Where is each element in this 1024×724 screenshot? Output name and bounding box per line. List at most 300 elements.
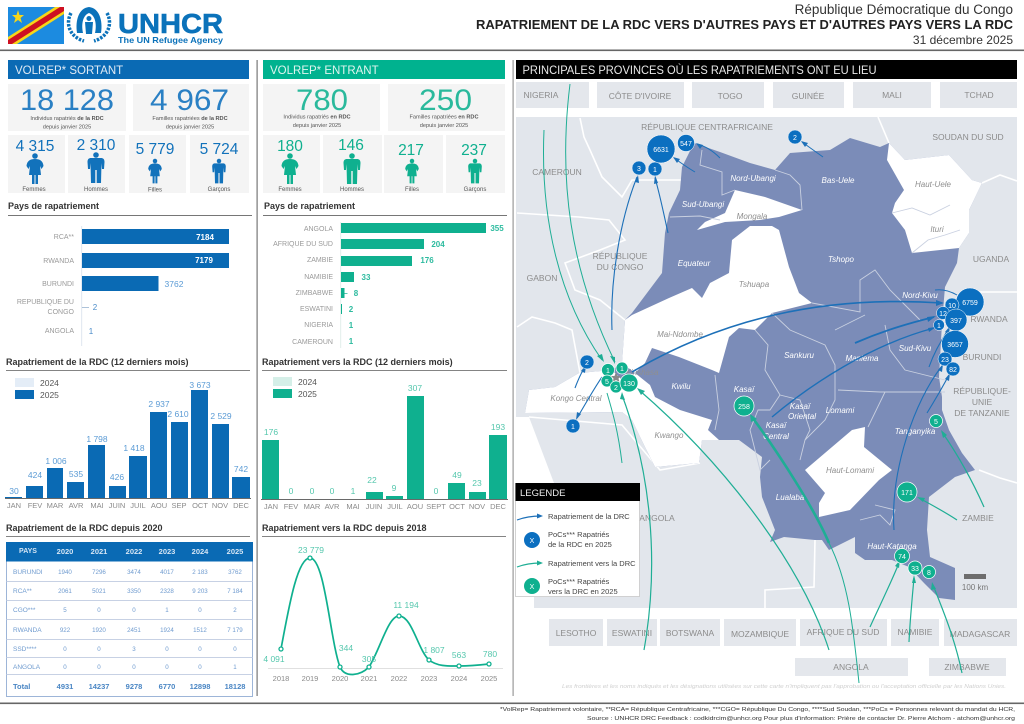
bar chart: 12 derniers mois sortant: NOV [212, 501, 228, 510]
stat: familles entrantes: Familles rapatriées en RDC [409, 114, 479, 120]
table: rapatriement depuis 2020: 1940 [58, 569, 72, 576]
bar chart: pays de rapatriement entrant: ZAMBIE [307, 257, 333, 264]
map markers: blue circles: 1 [937, 323, 941, 330]
table: rapatriement depuis 2020: 1 [165, 607, 169, 614]
title block: République Démocratique du Congo [795, 2, 1013, 17]
table: rapatriement depuis 2020: RCA** [13, 588, 32, 595]
bar chart: pays de rapatriement entrant: 33 [362, 273, 371, 282]
map markers: green circles: 5 [605, 379, 609, 386]
bar chart: 12 derniers mois entrant: 49 [452, 470, 462, 480]
bar chart: pays de rapatriement entrant: ESWATINI [300, 306, 333, 313]
map markers: blue circles: 82 [949, 367, 957, 374]
stat: garçons entrant [446, 135, 505, 193]
map markers: green circles: 258 [738, 404, 750, 411]
logo text: UNHCR: UNHCR [118, 8, 223, 39]
map labels: provinces: Central [763, 432, 789, 441]
bar chart: 12 derniers mois entrant: NOV [469, 502, 485, 511]
bar chart: 12 derniers mois entrant: OCT [449, 502, 465, 511]
bar chart: pays de rapatriement entrant: 176 [420, 256, 434, 265]
bar chart: pays de rapatriement sortant: ANGOLA [45, 328, 74, 335]
map labels: provinces [550, 174, 952, 551]
map labels: provinces: Maniema [846, 354, 879, 363]
bar chart: 12 derniers mois sortant [5, 378, 251, 510]
title block [476, 2, 1014, 47]
bar chart: 12 derniers mois entrant: 193 [491, 422, 505, 432]
bar chart: 12 derniers mois entrant: 307 [408, 383, 422, 393]
country boxes: bottom rows: BOTSWANA [666, 628, 714, 638]
stat: filles entrant: Filles [405, 187, 419, 193]
arrows: repatriation to DRC (green) [543, 84, 984, 683]
stat: familles entrantes [388, 84, 505, 131]
map labels: provinces: Lomami [826, 406, 854, 415]
bar chart: 12 derniers mois sortant: 2 610 [167, 409, 189, 419]
bar chart: pays de rapatriement entrant: ANGOLA [304, 226, 333, 233]
map labels: provinces: Haut-Katanga [867, 542, 917, 551]
stat: familles entrantes: 250 [419, 84, 472, 117]
table: rapatriement depuis 2020: 922 [60, 627, 71, 634]
bar chart: pays de rapatriement sortant: RWANDA [43, 258, 74, 265]
heading: depuis 2018: Rapatriement vers la RDC depuis 2018 [262, 523, 427, 533]
map labels: countries: SOUDAN DU SUD [932, 132, 1004, 142]
country boxes: top row: CÔTE D'IVOIRE [609, 91, 672, 101]
table: rapatriement depuis 2020: 5021 [92, 588, 106, 595]
stat: hommes entrant [323, 135, 382, 193]
legend: sortant: 2024 [40, 378, 59, 388]
table: rapatriement depuis 2020: 14237 [89, 682, 109, 691]
country boxes: bottom rows [549, 619, 1017, 676]
stat: garçons: 5 724 [200, 141, 239, 158]
map labels: countries: RÉPUBLIQUE CENTRAFRICAINE [641, 122, 773, 132]
map markers: blue circles: 397 [950, 318, 962, 325]
table: rapatriement depuis 2020: 4017 [160, 569, 174, 576]
disclaimer: Les frontières et les noms indiqués et les désignations utilisées sur cette carte n'impliquent pas l'approbation ou l'acceptation officielle par les Nations Unies. [562, 684, 1006, 690]
map markers: blue circles: 23 [941, 357, 949, 364]
heading: 12 derniers mois entrant: Rapatriement vers la RDC (12 derniers mois) [262, 357, 453, 367]
bar chart: 12 derniers mois entrant: 176 [264, 427, 278, 437]
map labels: countries: BURUNDI [963, 352, 1001, 362]
legend: de la RDC en 2025 [548, 540, 612, 549]
legend [516, 483, 640, 596]
bar chart: 12 derniers mois sortant: 1 006 [45, 456, 67, 466]
table: rapatriement depuis 2020: 7 184 [227, 588, 243, 595]
footer notes: Source : UNHCR DRC Feedback : codkidrcim@unhcr.org Pour plus d'information: Prière de contacter Dr. Pierre Atchom - atchom@unhcr.org [587, 716, 1015, 722]
stat: hommes: 2 310 [77, 137, 116, 154]
bar chart: pays de rapatriement entrant: ZIMBABWE [296, 290, 333, 297]
map markers: blue circles [566, 130, 984, 433]
bar chart: pays de rapatriement sortant: 2 [93, 303, 98, 312]
bar chart: 12 derniers mois sortant: 742 [234, 464, 248, 474]
country boxes: top row: TCHAD [964, 90, 994, 100]
table: rapatriement depuis 2020: 0 [165, 646, 169, 653]
map markers: blue circles: 10 [948, 303, 956, 310]
stat: individus sortants: 18 128 [20, 84, 114, 117]
map markers: green circles: 130 [623, 381, 635, 388]
bar chart: 12 derniers mois entrant: SEPT [426, 502, 446, 511]
heading: volrep sortant: VOLREP* SORTANT [15, 65, 123, 77]
country boxes: top row: NIGERIA [524, 90, 559, 100]
map labels: countries: RÉPUBLIQUE [593, 251, 648, 261]
legend: Rapatriement de la DRC [548, 512, 630, 521]
stat: familles sortantes: 4 967 [150, 84, 229, 117]
legend: vers la DRC en 2025 [548, 587, 618, 596]
map labels: countries: RÉPUBLIQUE- [953, 386, 1011, 396]
bar chart: 12 derniers mois sortant: JAN [7, 501, 21, 510]
line chart: depuis 2018: 2022 [391, 674, 407, 683]
bar chart: 12 derniers mois entrant: JUIL [387, 502, 403, 511]
bar chart: 12 derniers mois sortant: 1 418 [123, 443, 145, 453]
bar chart: 12 derniers mois entrant: MAI [346, 502, 360, 511]
country boxes: bottom rows: MADAGASCAR [950, 629, 1010, 639]
table: rapatriement depuis 2020: 0 [198, 607, 202, 614]
bar chart: 12 derniers mois sortant: 30 [9, 486, 19, 496]
stat: individus sortants: depuis janvier 2025 [43, 124, 91, 130]
DRC territory [525, 138, 982, 600]
line chart: depuis 2018: 4 091 [263, 654, 285, 664]
table: rapatriement depuis 2020: 18128 [225, 682, 245, 691]
country boxes: top row: TOGO [718, 91, 743, 101]
map labels: provinces: Equateur [678, 259, 711, 268]
map labels: provinces: Tshuapa [739, 280, 770, 289]
bar chart: 12 derniers mois entrant [261, 377, 508, 511]
map labels: provinces: Haut-Uele [915, 180, 952, 189]
bar chart: pays de rapatriement sortant: 7184 [196, 233, 214, 242]
bar chart: 12 derniers mois entrant: 22 [367, 475, 377, 485]
panel: map heading: PRINCIPALES PROVINCES OÙ LES RAPATRIEMENTS ONT EU LIEU [522, 64, 876, 77]
bar chart: 12 derniers mois sortant: FEV [28, 501, 42, 510]
bar chart: 12 derniers mois sortant: 2 937 [148, 399, 170, 409]
table: rapatriement depuis 2020: 3 [132, 646, 136, 653]
bar chart: 12 derniers mois entrant: AVR [325, 502, 340, 511]
stat: garçons [190, 135, 249, 193]
map labels: provinces: Sud-Ubangi [682, 200, 724, 209]
table: rapatriement depuis 2020: 3474 [127, 569, 141, 576]
bar chart: pays de rapatriement sortant: REPUBLIQUE DU [17, 299, 74, 306]
bar chart: 12 derniers mois entrant: 0 [289, 486, 294, 496]
bar chart: pays de rapatriement entrant: NAMIBIE [304, 274, 333, 281]
line chart: depuis 2018: 2018 [273, 674, 289, 683]
white provinces [525, 143, 982, 517]
bar chart: pays de rapatriement sortant: 3762 [165, 279, 184, 289]
line chart: depuis 2018 [263, 545, 503, 683]
map labels: countries: ANGOLA [639, 513, 675, 523]
table: rapatriement depuis 2020: 0 [97, 646, 101, 653]
bar chart: pays de rapatriement sortant: RCA** [54, 234, 74, 241]
table: rapatriement depuis 2020: 0 [165, 664, 169, 671]
table: rapatriement depuis 2020: 7 179 [227, 627, 243, 634]
scale bar [962, 574, 988, 592]
bar chart: pays de rapatriement sortant: 1 [89, 327, 94, 336]
map labels: provinces: Bas-Uele [822, 176, 855, 185]
table: rapatriement depuis 2020: 2 [233, 607, 237, 614]
bar chart: 12 derniers mois entrant: JAN [264, 502, 278, 511]
table: rapatriement depuis 2020: 0 [132, 664, 136, 671]
bar chart: 12 derniers mois entrant: 23 [472, 478, 482, 488]
legend: X [530, 538, 535, 545]
bar chart: pays de rapatriement entrant: NIGERIA [304, 322, 333, 329]
map labels: provinces: Mongala [737, 212, 768, 221]
legend: PoCs*** Rapatriés [548, 530, 610, 539]
map markers: green circles: 1 [620, 366, 624, 373]
bar chart: 12 derniers mois sortant: OCT [192, 501, 208, 510]
map markers: blue circles: 6631 [653, 147, 669, 154]
line chart: depuis 2018: 11 194 [393, 600, 419, 610]
bar chart: 12 derniers mois sortant: 1 798 [86, 434, 108, 444]
line chart: depuis 2018: 2020 [332, 674, 348, 683]
line chart: depuis 2018: 2019 [302, 674, 318, 683]
country boxes: bottom rows: NAMIBIE [898, 627, 933, 637]
country boxes: top row: GUINÉE [792, 91, 825, 101]
bar chart: pays de rapatriement entrant: 8 [354, 289, 359, 298]
table: rapatriement depuis 2020: 2 183 [192, 569, 208, 576]
line chart: depuis 2018: 305 [362, 654, 376, 664]
map labels: provinces: Kwango [655, 431, 684, 440]
map labels: provinces: Kasaï [734, 385, 755, 394]
legend: entrant: 2024 [298, 377, 317, 387]
bar chart: 12 derniers mois sortant: 426 [110, 472, 124, 482]
stat: garçons entrant: 237 [461, 142, 487, 159]
footer notes: *VolRep= Rapatriement volontaire, **RCA= République Centrafricaine, ***CGO= République Du Congo, ****Sud Soudan, ***PoCs = Personnes relevant du mandat du HCR, [500, 707, 1015, 713]
table: rapatriement depuis 2020: RWANDA [13, 627, 42, 634]
stat: femmes entrant: 180 [277, 138, 303, 155]
table: rapatriement depuis 2020: 0 [198, 646, 202, 653]
bar chart: pays de rapatriement entrant: 1 [349, 321, 354, 330]
bar chart: pays de rapatriement sortant [17, 226, 229, 346]
bar chart: 12 derniers mois entrant: AOU [407, 502, 423, 511]
line chart: depuis 2018: 2023 [421, 674, 437, 683]
stat: garçons entrant: Garçons [464, 187, 486, 193]
logo text: UNHCR: The UN Refugee Agency [118, 35, 223, 45]
table: rapatriement depuis 2020: CGO*** [13, 607, 36, 614]
heading: depuis 2020: Rapatriement de la RDC depuis 2020 [6, 523, 163, 533]
map labels: provinces: Kwilu [671, 382, 691, 391]
bar chart: pays de rapatriement sortant: 7179 [195, 256, 213, 265]
table: rapatriement depuis 2020: 3762 [228, 569, 242, 576]
stat: individus entrants: 780 [296, 84, 348, 117]
legend: PoCs*** Rapatriés [548, 577, 610, 586]
table: rapatriement depuis 2020: 0 [97, 607, 101, 614]
map labels: provinces: Ituri [930, 225, 944, 234]
stat: filles entrant: 217 [398, 142, 424, 159]
table: rapatriement depuis 2020: 9 203 [192, 588, 208, 595]
map labels: provinces: Tanganyika [895, 427, 936, 436]
table: rapatriement depuis 2020: 2023 [159, 547, 175, 556]
map labels: countries: DU CONGO [597, 262, 644, 272]
table: rapatriement depuis 2020: 0 [233, 646, 237, 653]
legend: LEGENDE [520, 488, 565, 499]
bar chart: 12 derniers mois sortant: 3 673 [189, 380, 211, 390]
table: rapatriement depuis 2020: 2024 [192, 547, 209, 556]
table: rapatriement depuis 2020: 2022 [126, 547, 142, 556]
map: DRC provinces and neighbours [516, 117, 1017, 608]
icon: DRC flag [8, 7, 64, 44]
heading: volrep entrant [263, 60, 505, 79]
footer notes [500, 707, 1015, 722]
table: rapatriement depuis 2020: 5 [63, 607, 67, 614]
map labels: countries: ZAMBIE [962, 513, 994, 523]
map labels: provinces: Mai-Ndombe [657, 330, 703, 339]
bar chart: 12 derniers mois entrant: 0 [434, 486, 439, 496]
table: rapatriement depuis 2020: 2328 [160, 588, 174, 595]
stat: femmes: Femmes [22, 187, 46, 193]
scale bar: 100 km [962, 583, 988, 592]
bar chart: pays de rapatriement sortant: CONGO [48, 309, 75, 316]
bar chart: pays de rapatriement entrant: 1 [349, 337, 354, 346]
heading: 12 derniers mois sortant: Rapatriement de la RDC (12 derniers mois) [6, 357, 189, 367]
map markers: green circles: 171 [901, 490, 913, 497]
stat: filles: Filles [148, 188, 162, 194]
map labels: countries: RWANDA [970, 314, 1008, 324]
table: rapatriement depuis 2020: 1512 [193, 627, 207, 634]
line chart: depuis 2018: 2025 [481, 674, 497, 683]
legend: entrant [273, 377, 317, 399]
line chart: depuis 2018: 23 779 [298, 545, 324, 555]
bar chart: pays de rapatriement entrant [273, 222, 504, 348]
stat: individus sortants: Individus rapatriés de la RDC [30, 116, 104, 122]
country boxes: bottom rows: MOZAMBIQUE [731, 629, 789, 639]
stat: femmes entrant [263, 135, 320, 193]
map markers: blue circles: 2 [793, 135, 797, 142]
table: rapatriement depuis 2020: 1920 [92, 627, 106, 634]
line chart: depuis 2018: 1 807 [423, 645, 445, 655]
table: rapatriement depuis 2020: Total [13, 682, 30, 691]
table: rapatriement depuis 2020: 0 [198, 664, 202, 671]
table: rapatriement depuis 2020: 7296 [92, 569, 106, 576]
bar chart: 12 derniers mois sortant: JUIL [130, 501, 146, 510]
table: rapatriement depuis 2020: 2021 [91, 547, 107, 556]
map labels: countries: CAMEROUN [532, 167, 582, 177]
bar chart: 12 derniers mois sortant: 2 529 [210, 411, 232, 421]
table: rapatriement depuis 2020: 12898 [190, 682, 210, 691]
map labels: countries: UGANDA [973, 254, 1010, 264]
stat: individus entrants [263, 84, 380, 131]
stat: femmes: 4 315 [16, 138, 54, 155]
bar chart: 12 derniers mois sortant: DEC [233, 501, 249, 510]
map markers: green circles: 74 [898, 554, 906, 561]
table: rapatriement depuis 2020: 2025 [227, 547, 243, 556]
panel: map heading [516, 60, 1017, 79]
bar chart: pays de rapatriement entrant: 2 [349, 305, 354, 314]
map markers: green circles: 2 [614, 385, 618, 392]
bar chart: pays de rapatriement entrant: AFRIQUE DU SUD [273, 241, 333, 248]
map markers: blue circles: 3 [637, 166, 641, 173]
arrows: repatriation from DRC (blue) [575, 142, 957, 530]
stat: familles sortantes [133, 84, 249, 131]
heading: pays de rapatriement entrant: Pays de rapatriement [264, 201, 355, 211]
panel: volrep sortant [8, 60, 249, 194]
bar chart: 12 derniers mois sortant: MAR [47, 501, 64, 510]
table: rapatriement depuis 2020 [6, 542, 253, 696]
map labels: countries [527, 122, 1011, 523]
table: rapatriement depuis 2020: 4931 [57, 682, 73, 691]
bar chart: 12 derniers mois entrant: JUIN [366, 502, 382, 511]
map labels: provinces: Kinshasa [626, 368, 659, 377]
map labels: provinces: Nord-Kivu [902, 291, 938, 300]
country boxes: bottom rows: LESOTHO [556, 628, 597, 638]
map labels: countries: DE TANZANIE [954, 408, 1010, 418]
stat: hommes [68, 135, 125, 193]
table: rapatriement depuis 2020: 9278 [126, 682, 142, 691]
bar chart: pays de rapatriement entrant: 355 [490, 224, 504, 233]
table: rapatriement depuis 2020: 2061 [58, 588, 72, 595]
stat: filles: 5 779 [136, 141, 174, 158]
table: rapatriement depuis 2020: 6770 [159, 682, 175, 691]
stat: filles [129, 135, 186, 194]
map labels: provinces: Sud-Kivu [899, 344, 932, 353]
table: rapatriement depuis 2020: ANGOLA [13, 664, 41, 671]
country boxes: bottom rows: ESWATINI [612, 628, 652, 638]
map labels: provinces: Kongo Central [550, 394, 602, 403]
stat: individus sortants [8, 84, 126, 131]
table: rapatriement depuis 2020: 2451 [127, 627, 141, 634]
bar chart: 12 derniers mois entrant: 9 [392, 483, 397, 493]
country boxes: bottom rows: ANGOLA [833, 662, 869, 672]
bar chart: pays de rapatriement entrant: 204 [431, 240, 445, 249]
stat: femmes entrant: Femmes [278, 187, 302, 193]
heading: pays de rapatriement sortant: Pays de rapatriement [8, 201, 99, 211]
line chart: depuis 2018: 2021 [361, 674, 377, 683]
map labels: provinces: Sankuru [784, 351, 814, 360]
map markers: blue circles: 1 [653, 167, 657, 174]
table: rapatriement depuis 2020: 3350 [127, 588, 141, 595]
stat: hommes entrant: Hommes [340, 187, 364, 193]
bar chart: 12 derniers mois sortant: 535 [69, 469, 83, 479]
arrowheads: blue [576, 141, 950, 420]
bar chart: pays de rapatriement entrant: CAMEROUN [292, 339, 333, 346]
line chart: depuis 2018: 780 [483, 649, 497, 659]
province borders [670, 150, 960, 525]
line chart: depuis 2018: 2024 [451, 674, 467, 683]
map markers: green circles: 5 [934, 419, 938, 426]
title block: 31 décembre 2025 [913, 33, 1013, 47]
stat: filles entrant [384, 135, 443, 193]
bar chart: 12 derniers mois entrant: 0 [330, 486, 335, 496]
bar chart: 12 derniers mois entrant: MAR [304, 502, 321, 511]
legend: sortant [15, 378, 59, 400]
map labels: countries: UNIE [972, 397, 992, 407]
map labels: provinces: Tshopo [828, 255, 855, 264]
stat: individus entrants: Individus rapatriés en RDC [283, 114, 351, 120]
arrowheads: green [597, 354, 947, 590]
stat: familles entrantes: depuis janvier 2025 [420, 123, 468, 129]
bar chart: 12 derniers mois entrant: 1 [351, 486, 356, 496]
bar chart: 12 derniers mois entrant: 0 [310, 486, 315, 496]
legend: sortant: 2025 [40, 390, 59, 400]
table: rapatriement depuis 2020: 0 [63, 646, 67, 653]
map markers: blue circles: 1 [571, 424, 575, 431]
country boxes: top row: MALI [882, 90, 902, 100]
bar chart: 12 derniers mois entrant: DEC [490, 502, 506, 511]
map markers: green circles: 8 [927, 570, 931, 577]
stat: hommes: Hommes [84, 187, 108, 193]
map markers: blue circles: 3657 [947, 342, 963, 349]
heading: volrep sortant [8, 60, 249, 79]
country boxes: top row [516, 82, 1017, 108]
map labels: provinces: Haut-Lomami [826, 466, 874, 475]
bar chart: 12 derniers mois sortant: MAI [90, 501, 104, 510]
table: rapatriement depuis 2020: 1924 [160, 627, 174, 634]
map markers: blue circles: 2 [585, 360, 589, 367]
heading: volrep entrant: VOLREP* ENTRANT [270, 65, 379, 77]
table: rapatriement depuis 2020: 0 [63, 664, 67, 671]
map markers: green circles [601, 362, 942, 578]
table: rapatriement depuis 2020: 0 [132, 607, 136, 614]
bar chart: 12 derniers mois entrant: FEV [284, 502, 298, 511]
map labels: provinces: Nord-Ubangi [730, 174, 776, 183]
panel: volrep entrant [263, 60, 505, 193]
bar chart: 12 derniers mois sortant: AOU [151, 501, 167, 510]
stat: familles sortantes: Familles rapatriées de la RDC [152, 116, 228, 122]
map markers: green circles: 33 [911, 566, 919, 573]
